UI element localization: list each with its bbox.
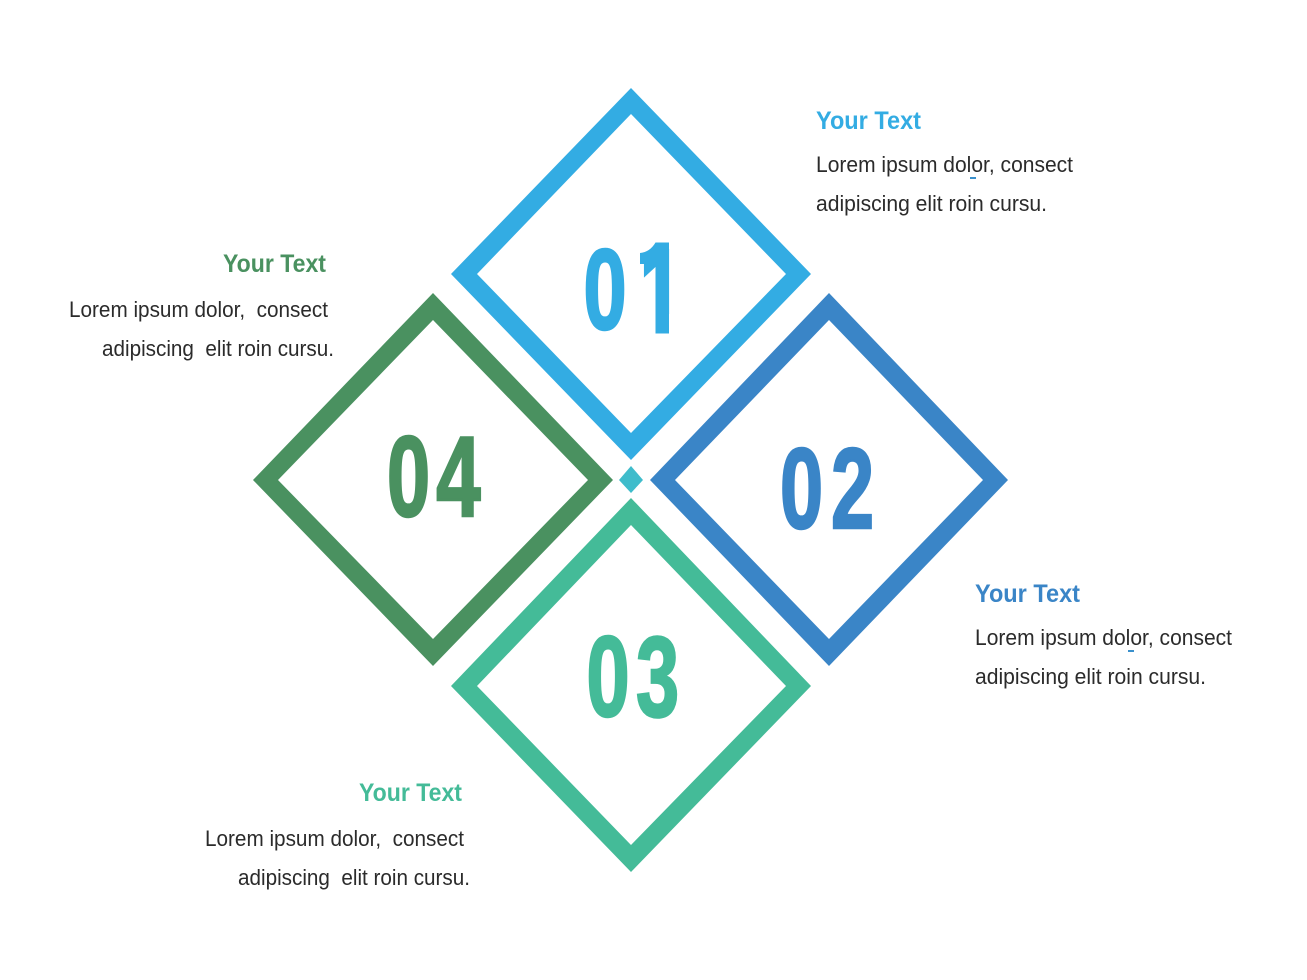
heading 03: Your Text xyxy=(359,779,463,807)
body 02: Lorem ipsum dolor, consect xyxy=(975,625,1232,650)
text block 04 xyxy=(69,250,334,361)
body 04: adipiscing elit roin cursu. xyxy=(102,336,334,361)
number 02: 0 xyxy=(780,425,823,553)
diamond 01 xyxy=(451,88,811,460)
body 03 xyxy=(205,826,470,890)
body 01: Lorem ipsum dolor, consect xyxy=(816,152,1073,177)
body 04: Lorem ipsum dolor, consect xyxy=(69,297,328,322)
blue dash mark 02 xyxy=(1128,650,1134,652)
diamond 03 xyxy=(451,498,811,872)
heading 02: Your Text xyxy=(975,580,1081,608)
number 03: 0 xyxy=(586,613,630,741)
number 02 xyxy=(780,425,874,553)
body 03: adipiscing elit roin cursu. xyxy=(238,865,470,890)
text block 02 xyxy=(975,580,1232,689)
number 03: 3 xyxy=(636,613,679,741)
body 03: Lorem ipsum dolor, consect xyxy=(205,826,464,851)
diamond 02 xyxy=(650,293,1008,666)
body 02: adipiscing elit roin cursu. xyxy=(975,664,1206,689)
number 04: 4 xyxy=(436,413,481,540)
number 02: 2 xyxy=(831,425,874,553)
center small diamond xyxy=(619,466,643,493)
heading 04: Your Text xyxy=(223,250,327,278)
body 01 xyxy=(816,152,1073,216)
heading 01: Your Text xyxy=(816,107,922,135)
text block 03 xyxy=(205,779,470,890)
number 04: 0 xyxy=(387,413,430,541)
number 04 xyxy=(387,413,481,541)
number 03 xyxy=(586,613,679,741)
number 01: 1 xyxy=(639,226,683,354)
body 04 xyxy=(69,297,334,361)
body 02 xyxy=(975,625,1232,689)
body 01: adipiscing elit roin cursu. xyxy=(816,191,1047,216)
diamond 04 xyxy=(253,293,613,666)
number 01: 0 xyxy=(583,226,627,354)
text block 01 xyxy=(816,107,1073,216)
blue dash mark 01 xyxy=(970,177,976,179)
number 01 xyxy=(583,226,687,354)
